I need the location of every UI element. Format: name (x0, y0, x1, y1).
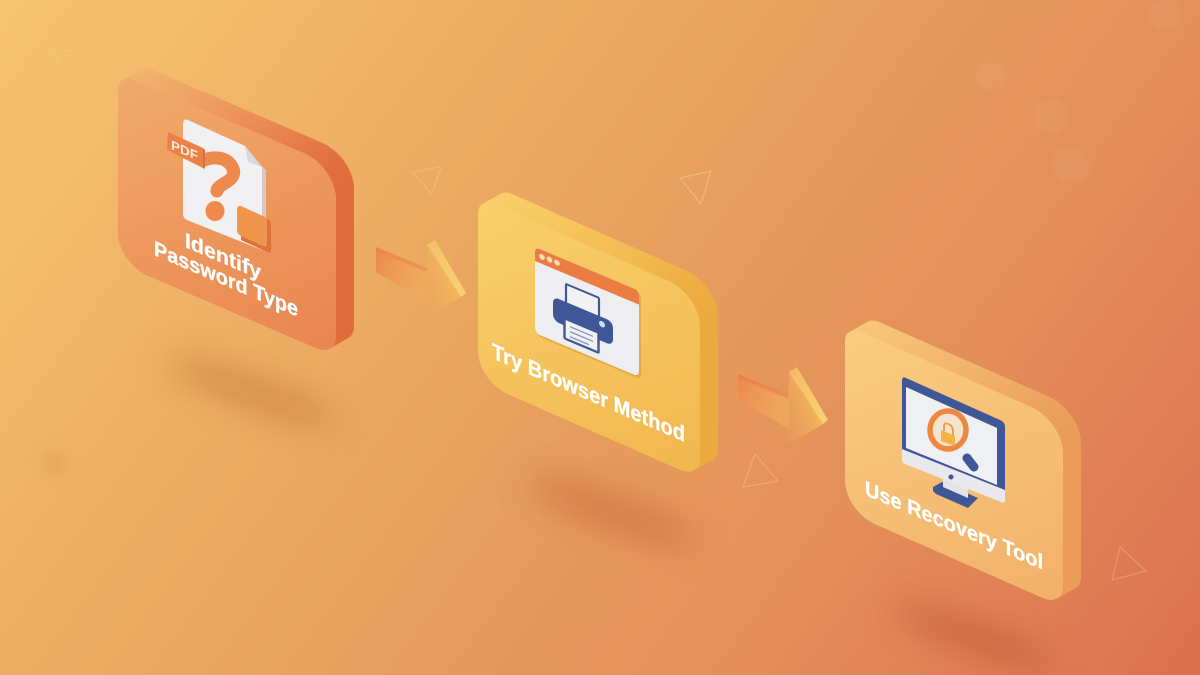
monitor bezel (902, 377, 1005, 494)
card 1: Identify Password Type (118, 55, 354, 364)
PDF tag: PDF (171, 138, 198, 163)
monitor base (933, 482, 978, 508)
card 3: Use Recovery Tool (845, 307, 1081, 615)
window title bar (535, 247, 639, 305)
label: Identify Password Type: Password Type (154, 236, 298, 322)
window (535, 247, 639, 377)
question mark dot (206, 201, 224, 221)
shadow under card 2 (523, 468, 701, 556)
shadow under card 3 (887, 594, 1057, 675)
background smudge (42, 450, 68, 476)
arrow from card 1 to card 2 (376, 240, 466, 318)
card 2 block body (478, 179, 718, 487)
card 1 block body (118, 55, 354, 364)
document fold (245, 146, 262, 167)
printer (553, 279, 613, 359)
lock (941, 423, 955, 446)
window shadow (537, 250, 641, 380)
orange square badge (237, 206, 271, 253)
magnifier handle (967, 458, 974, 467)
title bar dots (539, 252, 560, 267)
label: Use Recovery Tool: Use Recovery Tool (865, 476, 1043, 575)
card 3 block body (845, 307, 1081, 615)
icon: browser window with printer (535, 247, 641, 380)
question mark hook (204, 158, 234, 191)
document sheet side (262, 166, 266, 252)
magnifier ring (930, 411, 966, 449)
label: Try Browser Method: Try Browser Method (492, 338, 685, 447)
monitor chin (902, 449, 1005, 503)
label: Identify Password Type: Identify (185, 228, 262, 285)
icon: PDF document with question mark (167, 120, 271, 253)
shadow under card 1 (160, 346, 344, 438)
icon: monitor with magnifier and lock (902, 377, 1005, 508)
decorative triangle outlines (53, 50, 1146, 580)
monitor screen (906, 387, 997, 485)
document sheet (183, 120, 262, 250)
card 2: Try Browser Method (478, 179, 718, 487)
monitor stand (943, 474, 968, 498)
background decorative circles (976, 0, 1181, 184)
power dot (948, 474, 954, 480)
arrow from card 2 to card 3 (738, 367, 828, 445)
